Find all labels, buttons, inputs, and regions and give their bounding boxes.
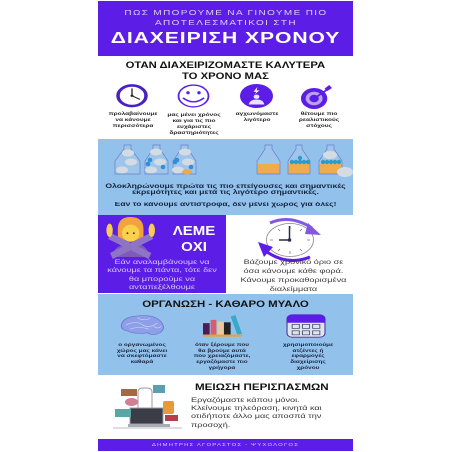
organization text 1: ο οργανωμένος bbox=[118, 342, 166, 347]
icon: brain bbox=[120, 315, 164, 335]
section heading: time management: ΤΟ ΧΡΟΝΟ ΜΑΣ bbox=[182, 70, 269, 82]
organization text 1: να σκεφτόμαστε bbox=[117, 353, 167, 358]
say no text: θα μπορούμε να bbox=[129, 276, 195, 282]
time limit text: όσα κάνουμε κάθε φορά. bbox=[244, 268, 343, 275]
benefit text 2: και για τις πιο bbox=[172, 118, 215, 123]
icon: books bbox=[203, 315, 242, 337]
organization text 1 bbox=[116, 342, 167, 364]
organization text 2: εργαζόμαστε πιο bbox=[196, 359, 248, 364]
say no text: ανταπεξέλθουμε bbox=[129, 284, 195, 291]
warning text: Εάν το κάνουμε αντίστροφα, δεν μένει χώρος για όλες! bbox=[115, 202, 336, 208]
say no text bbox=[107, 258, 217, 291]
benefit text 3: λιγότερο bbox=[243, 117, 270, 122]
benefit text 4 bbox=[298, 111, 339, 128]
time limit text: διαλείμματα bbox=[270, 286, 317, 293]
organization text 2: θα βρούμε αυτά bbox=[198, 348, 246, 352]
organization text 3: ατζέντες ή bbox=[293, 348, 323, 352]
time limit text bbox=[241, 259, 346, 293]
section heading: time management bbox=[126, 60, 325, 82]
organization text 2: όταν ξέρουμε που bbox=[195, 342, 249, 347]
priorities text: εκρεμότητες και μετά τις λιγότερο σημαντικές. bbox=[132, 189, 319, 196]
say no heading: ΟΧΙ bbox=[181, 240, 207, 254]
organization text 2: γρήγορα bbox=[209, 365, 235, 370]
benefit text 2: μας μένει χρόνος bbox=[167, 112, 220, 117]
organization heading: ΟΡΓΑΝΩΣΗ - ΚΑΘΑΡΟ ΜΥΑΛΟ bbox=[142, 298, 309, 308]
panel: organization bbox=[98, 294, 353, 375]
benefit text 4: θέτουμε πιο bbox=[300, 111, 337, 116]
header subtitle bbox=[124, 8, 328, 27]
distraction text: Κλείνουμε τηλεόραση, κινητά και bbox=[191, 405, 322, 412]
section heading: time management: ΟΤΑΝ ΔΙΑΧΕΙΡΙΖΟΜΑΣΤΕ ΚΑΛΥΤΕΡΑ bbox=[126, 60, 325, 70]
panel: priorities bbox=[98, 139, 353, 215]
header subtitle: ΠΩΣ ΜΠΟΡΟΥΜΕ ΝΑ ΓΙΝΟΥΜΕ ΠΙΟ bbox=[124, 8, 328, 17]
panel: say no bbox=[98, 215, 226, 293]
benefit text 2: ευχάριστες bbox=[176, 124, 211, 129]
jars: wrong order bbox=[114, 144, 196, 174]
organization text 2: που χρειαζόμαστε, bbox=[194, 353, 250, 358]
organization text 2 bbox=[194, 342, 250, 370]
main title: ΔΙΑΧΕΙΡΙΣΗ ΧΡΟΝΟΥ bbox=[111, 30, 340, 47]
icon: smile bbox=[178, 84, 210, 108]
distraction text: προσοχή. bbox=[191, 422, 230, 428]
priorities text: Ολοκληρώνουμε πρώτα τις πιο επείγουσες και σημαντικές bbox=[105, 183, 346, 190]
benefit text 1 bbox=[108, 111, 158, 128]
footer bbox=[98, 439, 353, 451]
organization text 1: καθαρά bbox=[131, 359, 153, 364]
icon: clock with arrows bbox=[258, 218, 321, 262]
benefit text 2 bbox=[167, 112, 220, 135]
header subtitle: ΑΠΟΤΕΛΕΣΜΑΤΙΚΟΙ ΣΤΗ bbox=[155, 18, 297, 27]
benefit text 1: προλαβαίνουμε bbox=[108, 111, 157, 116]
benefit text 1: να κάνουμε bbox=[115, 117, 150, 122]
organization text 3 bbox=[283, 342, 333, 370]
organization text 3: χρόνου bbox=[297, 365, 319, 370]
organization text 3: διαχείρισης bbox=[290, 359, 326, 364]
benefit text 1: περισσότερα bbox=[112, 123, 153, 128]
organization text 3: εφαρμογές bbox=[291, 353, 325, 358]
say no heading bbox=[172, 224, 215, 254]
benefit text 4: στόχους bbox=[306, 123, 331, 128]
icon: person crossing arms bbox=[106, 217, 155, 259]
benefit text 4: ρεαλιστικούς bbox=[298, 117, 339, 122]
benefit text 3 bbox=[235, 111, 278, 122]
footer text: ΔΗΜΗΤΡΗΣ ΑΓΟΡΑΣΤΟΣ - ΨΥΧΟΛΟΓΟΣ bbox=[152, 442, 299, 447]
icon: calendar bbox=[286, 314, 326, 338]
time limit text: Βάζουμε χρονικό όριο σε bbox=[244, 259, 343, 266]
icon: clock bbox=[116, 84, 148, 108]
header banner bbox=[98, 1, 353, 56]
icon: calm person bbox=[240, 84, 273, 108]
time limit text: Κάνουμε προκαθορισμένα bbox=[241, 277, 346, 284]
benefit text 2: δραστηριότητες bbox=[169, 130, 218, 135]
priorities text bbox=[105, 183, 346, 196]
distraction text: Εργαζόμαστε κάπου μόνοι. bbox=[191, 397, 300, 404]
organization text 3: χρησιμοποιούμε bbox=[283, 342, 333, 347]
organization text 1: χώρος μας κάνει bbox=[117, 348, 167, 353]
say no text: Εάν αναλαμβάνουμε να bbox=[114, 258, 210, 266]
say no heading: ΛΕΜΕ bbox=[173, 224, 215, 238]
distraction text: οτιδήποτε άλλο μας αποσπά την bbox=[191, 413, 321, 420]
distraction heading: ΜΕΙΩΣΗ ΠΕΡΙΣΠΑΣΜΩΝ bbox=[195, 382, 329, 392]
say no text: κάνουμε τα πάντα, τότε δεν bbox=[107, 267, 217, 274]
distraction text bbox=[191, 397, 322, 428]
icon: target bbox=[300, 85, 332, 109]
benefit text 3: αγχωνόμαστε bbox=[235, 111, 278, 116]
icon: distracted at computer bbox=[113, 385, 182, 428]
jars: right order bbox=[256, 144, 353, 177]
